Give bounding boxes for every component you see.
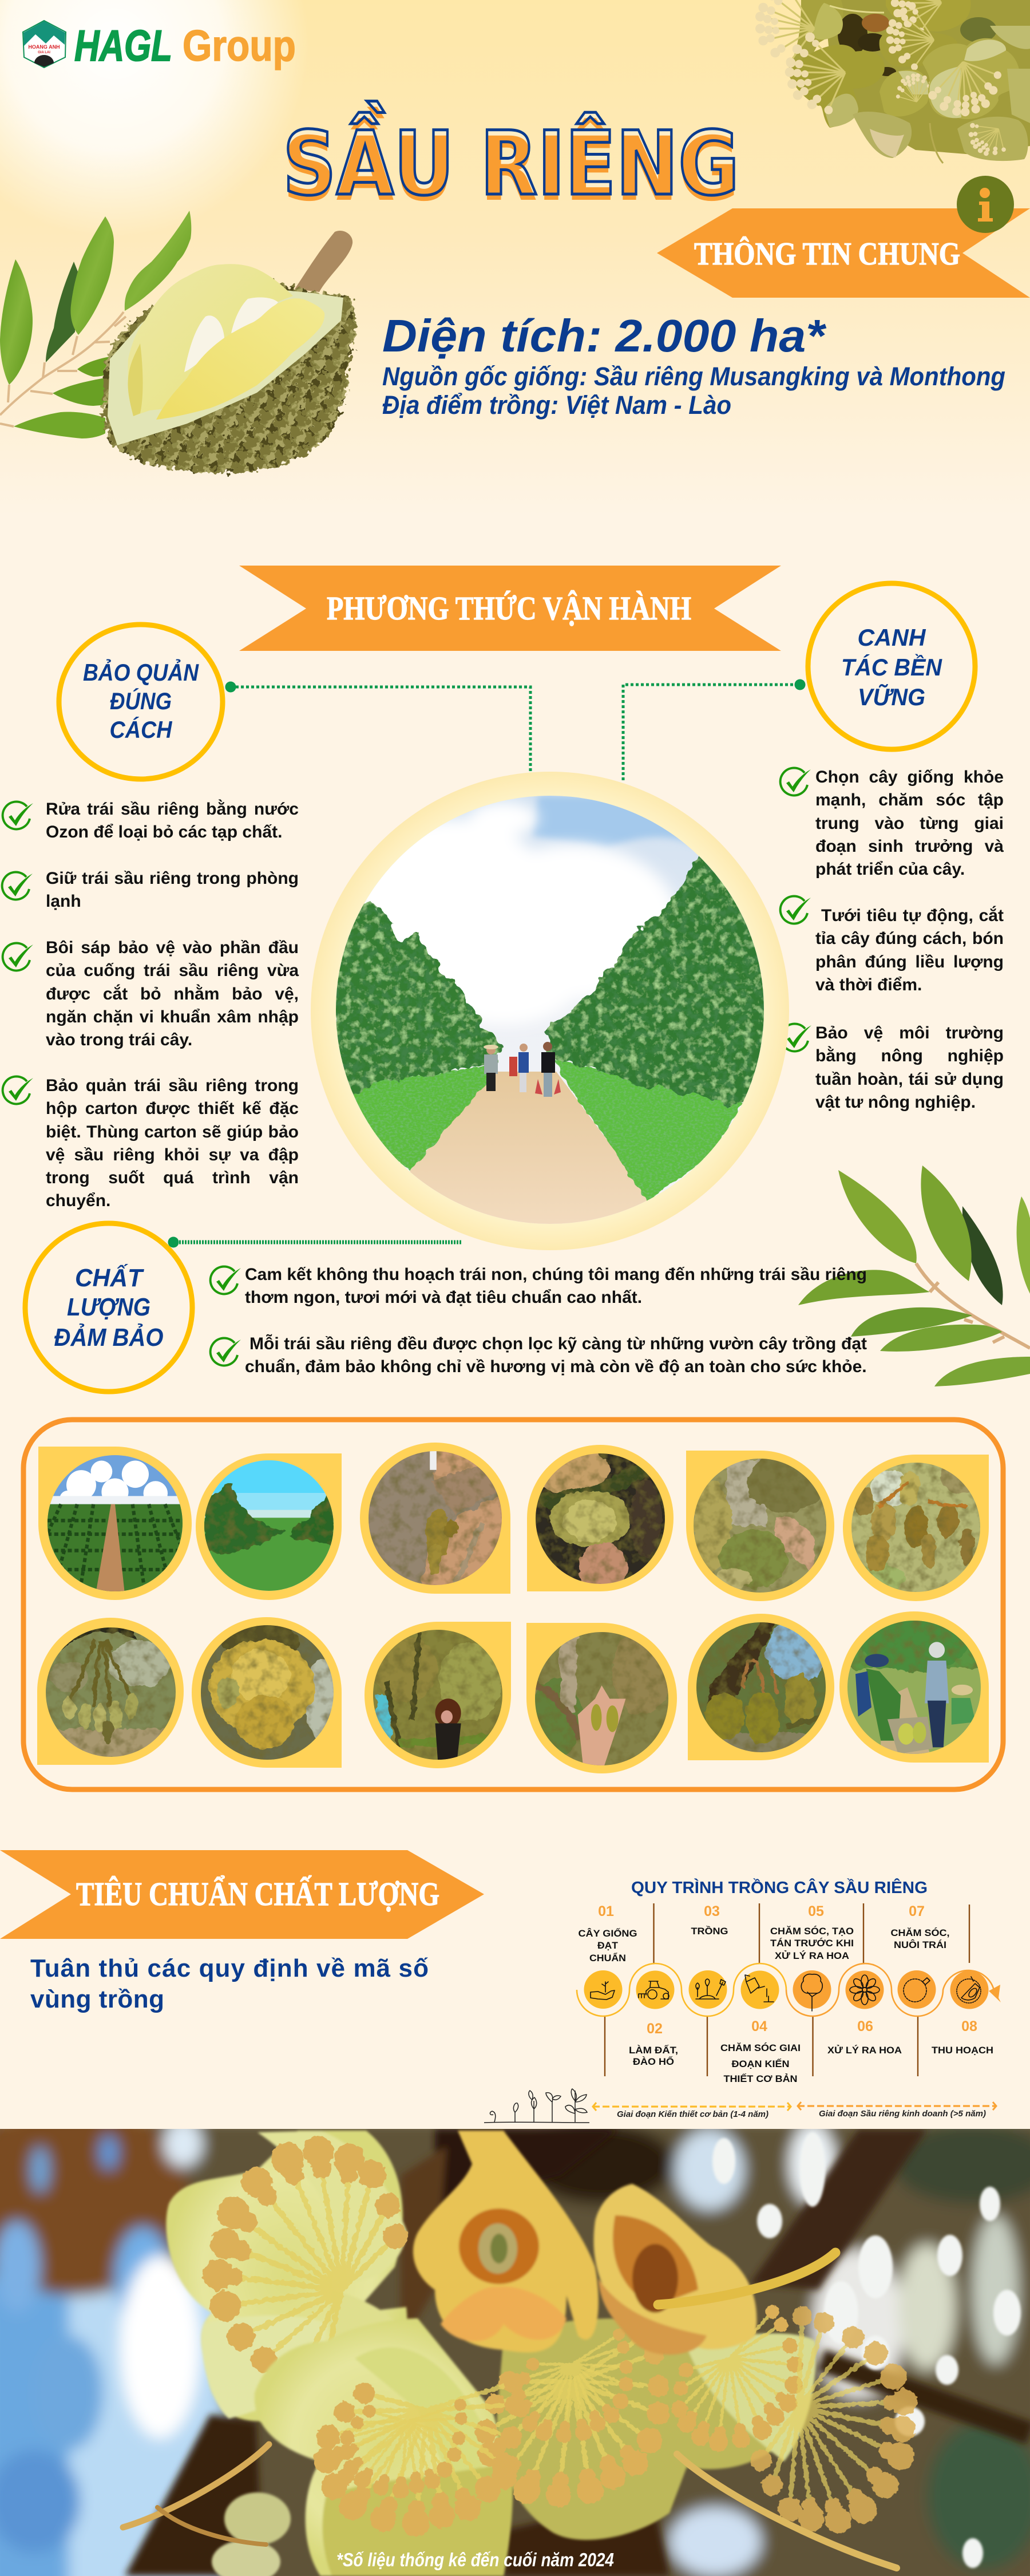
photo 5: hand holding stems	[680, 1445, 839, 1606]
step labels: CHĂM SÓC GIAI	[720, 2042, 801, 2053]
step numbers	[598, 1903, 977, 2037]
flower 5 inner stamens	[491, 2297, 665, 2472]
icon: flower	[850, 1975, 880, 2005]
text: chất lượng 1	[245, 1263, 867, 1310]
flower e	[880, 68, 938, 116]
text: địa điểm trồng: Địa điểm trồng: Việt Nam - Lào	[382, 390, 731, 420]
step labels: LÀM ĐẤT,	[629, 2045, 678, 2056]
process vertical lines	[605, 1903, 969, 2076]
icon: watering can	[745, 1975, 774, 2002]
text: bảo quản 2: Giữ trái sầu riêng trong phòng	[46, 869, 299, 888]
text: bảo quản 2: lạnh	[46, 892, 81, 911]
photo 6: young fruits	[839, 1449, 993, 1605]
image: open durian	[103, 231, 357, 473]
photo 4: bud cluster and hand	[522, 1440, 678, 1597]
circle: chất lượng đảm bảo: CHẤT	[75, 1263, 144, 1292]
wavy line	[577, 1963, 995, 2016]
step numbers: 08	[961, 2018, 977, 2034]
icon: tractor	[639, 1981, 669, 1999]
circle: canh tác bền vững: TÁC BỀN	[841, 654, 943, 681]
text: canh tác 3: vật tư nông nghiệp.	[815, 1093, 976, 1112]
photo 2: green field	[204, 1460, 334, 1591]
text: chất lượng 2	[245, 1333, 867, 1379]
flower f	[922, 38, 1020, 124]
road	[410, 1072, 648, 1224]
bottom photo: durian flowers	[0, 2101, 1030, 2576]
timeline label 1: Giai đoạn Kiến thiết cơ bản (1-4 năm)	[617, 2109, 768, 2119]
grass left	[350, 1066, 486, 1171]
flower 6 stamens	[649, 2279, 835, 2479]
text: bảo quản 1: Ozon để loại bỏ các tạp chất.	[46, 823, 282, 841]
photo 12: farmers with harvest	[834, 1607, 994, 1754]
text: canh tác 3: bằng nông nghiệp	[815, 1046, 1004, 1065]
bottom note: *Số liệu thống kê đến cuối năm 2024	[336, 2549, 614, 2570]
text: bảo quản 3: Bôi sáp bảo vệ vào phần đầu	[46, 938, 299, 957]
grass right	[555, 1059, 744, 1202]
step labels: THU HOẠCH	[932, 2045, 993, 2056]
text: bảo quản 4: trong suốt quá trình vận	[46, 1168, 299, 1187]
flower 1: pale yellow top left	[166, 2131, 407, 2421]
step labels: XỬ LÝ RA HOA	[827, 2045, 902, 2056]
step numbers: 05	[808, 1903, 824, 1919]
icon: sprouts growth	[484, 2089, 589, 2123]
step labels: THIẾT CƠ BẢN	[723, 2073, 798, 2084]
step circles	[584, 1970, 989, 2009]
right bokeh dots	[712, 2132, 1021, 2568]
banner: tiêu chuẩn chất lượng: TIÊU CHUẨN CHẤT LƯỢNG	[76, 1875, 439, 1913]
icon: info circle	[957, 176, 1014, 233]
step numbers: 07	[909, 1903, 925, 1919]
icon: HAGL shield: HOANG ANH	[28, 44, 60, 50]
process title: QUY TRÌNH TRỒNG CÂY SẦU RIÊNG	[631, 1878, 928, 1897]
background	[0, 0, 1030, 515]
icon: durian outline	[904, 1978, 930, 2002]
text: canh tác 1: đoạn sinh trưởng và	[815, 837, 1004, 856]
step labels: XỬ LÝ RA HOA	[775, 1950, 849, 1961]
title: SẦU RIÊNG	[283, 101, 739, 215]
circle: bảo quản đúng cách: ĐÚNG	[110, 688, 172, 714]
flower 3: orange right	[594, 2184, 756, 2354]
timeline label 2: Giai đoạn Sầu riêng kinh doanh (>5 năm)	[819, 2109, 986, 2119]
right stamens	[726, 2289, 938, 2547]
heading: diện tích: Diện tích: 2.000 ha*	[382, 310, 827, 361]
photo 11: durians on branch	[683, 1609, 839, 1765]
trees left	[335, 900, 501, 1116]
blurred backdrop	[0, 2101, 1030, 2576]
text: bảo quản 1	[46, 799, 299, 841]
icon: HAGL shield: GIA LAI	[38, 51, 50, 54]
white creases	[184, 315, 224, 372]
text: canh tác 1	[815, 766, 1004, 881]
panel: photo gallery	[21, 1420, 1003, 1789]
step labels: CHĂM SÓC,	[890, 1927, 950, 1938]
timeline arrows	[593, 2106, 996, 2107]
text: canh tác 2: tỉa cây đúng cách, bón	[815, 929, 1004, 948]
text: bảo quản 4: Bảo quản trái sầu riêng trong	[46, 1076, 299, 1095]
text: canh tác 2: và thời điểm.	[815, 975, 922, 994]
icon: hand with seedling	[591, 1982, 615, 2000]
pistil strands	[830, 6, 943, 163]
step numbers: 06	[857, 2018, 873, 2034]
leaves right	[798, 1165, 1030, 1386]
banner: phương thức vận hành	[239, 566, 781, 651]
text: chất lượng 1: thơm ngon, tươi mới và đạt tiêu chuẩn cao nhất.	[245, 1288, 642, 1307]
banner: tiêu chuẩn chất lượng	[0, 1850, 484, 1939]
leaves left	[0, 211, 191, 438]
banner: thông tin chung	[657, 208, 1030, 298]
text: bảo quản 2	[46, 869, 299, 911]
connector dots	[168, 679, 806, 1248]
photo 3: bark and buds	[355, 1438, 515, 1598]
flower 4 inner stamens	[321, 2361, 496, 2524]
logo wordmark	[74, 22, 296, 70]
step numbers: 04	[751, 2018, 767, 2034]
dark branches	[125, 2129, 1030, 2576]
text: tuân thủ	[30, 1954, 429, 2013]
logo wordmark: Group	[183, 22, 296, 70]
photo 1: orchard rows	[21, 1455, 199, 1591]
text: canh tác 1: mạnh, chăm sóc tập	[815, 791, 1004, 809]
step numbers: 03	[704, 1903, 720, 1919]
photo 7: hanging buds	[33, 1614, 189, 1770]
photo frames	[37, 1443, 989, 1773]
circle: bảo quản đúng cách: CÁCH	[110, 716, 173, 743]
flower 5: right of centre	[497, 2318, 816, 2540]
text: chất lượng 2: chuẩn, đảm bảo không chỉ về hương vị mà còn về độ an toàn cho sức khỏe.	[245, 1357, 867, 1376]
circle: bảo quản đúng cách	[59, 625, 223, 779]
step labels: TÁN TRƯỚC KHI	[770, 1938, 854, 1949]
text: bảo quản 4	[46, 1074, 299, 1213]
stem	[295, 231, 352, 292]
text: chất lượng 2: Mỗi trái sầu riêng đều được chọn lọc kỹ càng từ những vườn cây trồng đạt	[249, 1334, 867, 1353]
circle: canh tác bền vững	[808, 583, 975, 749]
circle: bảo quản đúng cách: BẢO QUẢN	[83, 658, 199, 686]
step labels: ĐẠT	[597, 1941, 618, 1951]
step labels	[578, 1926, 993, 2084]
text: bảo quản 3: ngăn chặn vi khuẩn xâm nhập	[46, 1008, 299, 1026]
photo 10: fruits in palm	[522, 1619, 682, 1779]
photo 9: person in canopy	[360, 1617, 516, 1773]
dark gaps	[838, 14, 896, 76]
image: durian flower cluster top right	[755, 0, 1030, 165]
flower a	[755, 0, 843, 72]
text: bảo quản 4: hộp carton được thiết kế đặc	[46, 1099, 299, 1118]
people on road	[484, 1042, 561, 1097]
text: bảo quản 3	[46, 937, 299, 1052]
text: canh tác 1: trung vào từng giai	[815, 814, 1004, 833]
trees right	[546, 854, 770, 1122]
text: canh tác 2	[815, 904, 1004, 997]
icon: cut durian	[957, 1977, 981, 2003]
text: bảo quản 3: được cắt bỏ nhằm bảo vệ,	[46, 985, 299, 1003]
text: tuân thủ: vùng trồng	[30, 1985, 164, 2013]
text: bảo quản 3: của cuống trái sầu riêng vừa	[46, 961, 299, 980]
step numbers: 02	[647, 2021, 663, 2037]
connectors: dotted lines	[179, 685, 797, 1242]
logo: HAGL Group	[23, 21, 296, 70]
title: SẦU RIÊNG	[283, 101, 739, 215]
circle: chất lượng đảm bảo	[25, 1223, 192, 1392]
text: tuân thủ: Tuân thủ các quy định về mã số	[30, 1954, 429, 1982]
text: bảo quản 4: vệ sầu riêng khỏi sự va đập	[46, 1145, 299, 1164]
flower 4: lower centre	[255, 2318, 513, 2576]
process: quy trình trồng cây	[484, 1878, 1001, 2123]
check icons	[2, 768, 811, 1365]
step numbers: 01	[598, 1903, 614, 1919]
title: SẦU RIÊNG	[283, 107, 739, 221]
circle: canh tác bền vững: CANH	[857, 624, 926, 651]
step labels: ĐÀO HỐ	[633, 2056, 674, 2067]
arrow head	[989, 1985, 1001, 2002]
flower d	[880, 2, 958, 70]
timeline arrow heads	[593, 2102, 996, 2111]
icon: HAGL shield	[23, 21, 66, 68]
husk with spikes	[103, 269, 357, 473]
flower 5 stamens	[442, 2274, 722, 2554]
step labels: TRỒNG	[691, 1926, 728, 1937]
flower lower left	[853, 112, 912, 158]
central photo circle	[311, 772, 789, 1250]
text: canh tác 1: phát triển của cây.	[815, 860, 965, 879]
flower 2: orange centre	[413, 2131, 599, 2353]
text: chất lượng 1: Cam kết không thu hoạch trái non, chúng tôi mang đến những trái sầu riêng	[245, 1265, 867, 1284]
pistils	[123, 2253, 897, 2568]
olive base of cluster	[824, 0, 1030, 155]
small bud lower left	[212, 2492, 291, 2576]
flower c top	[886, 0, 971, 35]
text: canh tác 2: phân đúng liều lượng	[815, 953, 1004, 971]
text: bảo quản 4: chuyển.	[46, 1191, 110, 1210]
flower 1 stamens	[203, 2136, 408, 2407]
banner: thông tin chung: THÔNG TIN CHUNG	[694, 236, 960, 272]
icon: tree	[801, 1974, 822, 2011]
banner: phương thức vận hành: PHƯƠNG THỨC VẬN HÀNH	[327, 590, 691, 627]
circle: canh tác bền vững: VỮNG	[858, 683, 925, 710]
logo wordmark: HAGL	[74, 22, 172, 70]
photo 8: flower bunch	[188, 1612, 347, 1773]
circle: chất lượng đảm bảo: ĐẢM BẢO	[54, 1323, 164, 1352]
text: bảo quản 1: Rửa trái sầu riêng bằng nước	[46, 800, 299, 819]
text: canh tác 2: Tưới tiêu tự động, cắt	[821, 906, 1004, 925]
text: canh tác 3	[815, 1022, 1004, 1114]
step labels: NUÔI TRÁI	[894, 1939, 946, 1950]
circle: chất lượng đảm bảo: LƯỢNG	[67, 1293, 150, 1321]
step labels: CÂY GIỐNG	[578, 1927, 637, 1939]
step labels: ĐOẠN KIẾN	[731, 2059, 790, 2069]
flower b	[778, 27, 885, 128]
text: canh tác 3: Bảo vệ môi trường	[815, 1024, 1004, 1042]
pale rim	[108, 280, 343, 445]
text: bảo quản 3: vào trong trái cây.	[46, 1030, 192, 1049]
text: canh tác 3: tuần hoàn, tái sử dụng	[815, 1070, 1004, 1089]
text: canh tác 1: Chọn cây giống khỏe	[815, 768, 1004, 787]
text: bảo quản 4: biệt. Thùng carton sẽ giúp bảo	[46, 1123, 299, 1141]
step labels: CHUẨN	[589, 1953, 626, 1963]
flower g and right side	[957, 26, 1030, 165]
flower 4 stamens	[284, 2312, 572, 2576]
step labels: CHĂM SÓC, TẠO	[770, 1926, 854, 1937]
icon: plants and shovel	[696, 1979, 726, 1999]
front flesh lobe	[156, 298, 324, 420]
back flesh lobe	[128, 264, 293, 416]
